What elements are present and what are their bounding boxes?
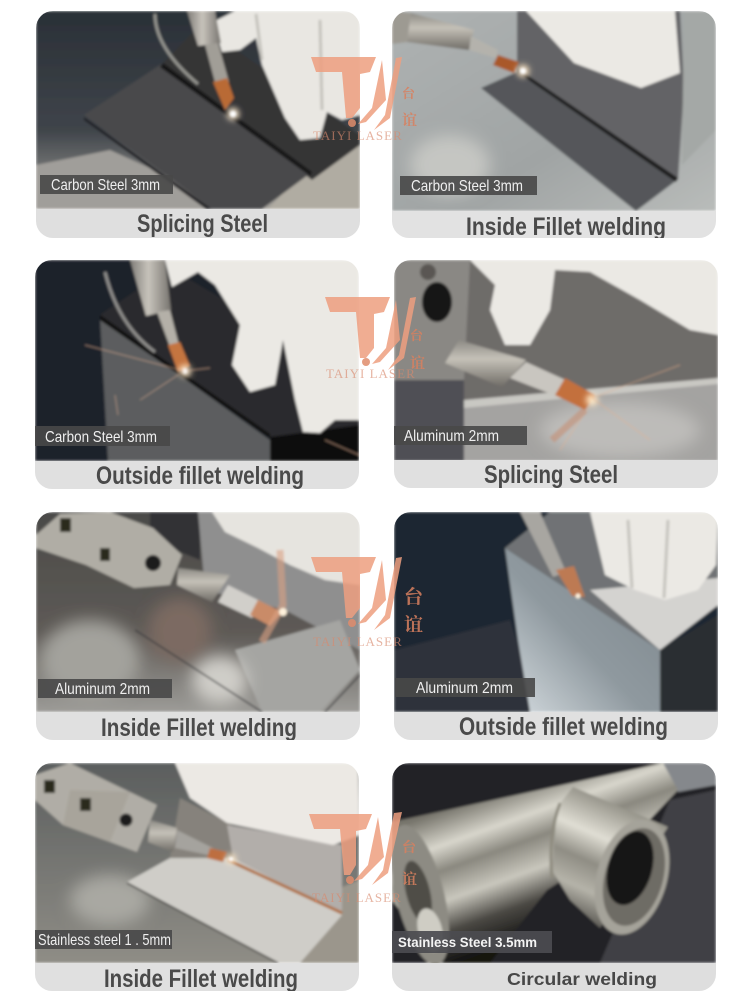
- material label: Stainless steel 1 . 5mm: [38, 932, 171, 949]
- caption strip: [394, 712, 718, 740]
- panel: inside fillet welding, carbon steel 3mm: [392, 11, 716, 241]
- material label: Aluminum 2mm: [404, 428, 499, 445]
- watermark: Taiyi Laser logo, row 2: [325, 297, 425, 381]
- photo: aluminium corner joint: [394, 512, 718, 712]
- watermark: Taiyi Laser logo, row 2: TAIYI LASER: [326, 366, 416, 381]
- panel: splicing steel, carbon steel 3mm: [36, 11, 360, 238]
- watermark: Taiyi Laser logo, row 2: 台: [410, 328, 424, 343]
- caption: Outside fillet welding: [459, 713, 668, 741]
- watermark: Taiyi Laser logo, row 4: TAIYI LASER: [312, 890, 402, 905]
- caption: Inside Fillet welding: [101, 714, 297, 742]
- watermark: Taiyi Laser logo, row 4: [309, 812, 417, 905]
- watermark: Taiyi Laser logo, row 1: 台: [402, 86, 416, 101]
- watermark: Taiyi Laser logo, row 3: 台: [404, 586, 424, 608]
- watermark: Taiyi Laser logo, row 3: 谊: [404, 614, 423, 636]
- panel: outside fillet welding, aluminum 2mm: [394, 512, 718, 741]
- material label: Aluminum 2mm: [55, 681, 150, 698]
- photo: plates and gloved hand: [36, 11, 360, 209]
- watermark: Taiyi Laser logo, row 4: 谊: [402, 870, 417, 888]
- panel: splicing steel, aluminum 2mm: [394, 260, 718, 489]
- material label: [392, 931, 552, 953]
- watermark: Taiyi Laser logo, row 1: [311, 57, 417, 143]
- watermark: Taiyi Laser logo, row 3: TAIYI LASER: [313, 634, 403, 649]
- watermark: Taiyi Laser logo, row 4: 台: [402, 839, 417, 856]
- panel: circular welding, stainless steel 3.5mm: [379, 763, 716, 991]
- material label: Aluminum 2mm: [416, 680, 513, 697]
- material label: Carbon Steel 3mm: [51, 177, 160, 194]
- panel: outside fillet welding, carbon steel 3mm: [35, 260, 359, 490]
- caption strip: [394, 460, 718, 488]
- photo: upright plate on base plate: [392, 11, 716, 211]
- caption strip: [35, 461, 359, 489]
- material label: Carbon Steel 3mm: [411, 178, 523, 195]
- panel: inside fillet welding, aluminum 2mm: [36, 512, 360, 742]
- caption strip: [36, 209, 360, 238]
- caption strip: [392, 211, 716, 238]
- panel: inside fillet welding, stainless steel 1.5mm: [35, 763, 359, 993]
- watermark: Taiyi Laser logo, row 1: TAIYI LASER: [313, 128, 403, 143]
- caption: Splicing Steel: [137, 210, 268, 238]
- caption strip: [35, 963, 359, 991]
- caption: Outside fillet welding: [96, 462, 304, 490]
- caption: Inside Fillet welding: [104, 965, 298, 993]
- caption: Inside Fillet welding: [466, 213, 666, 241]
- photo: torch on stainless plate: [35, 763, 359, 963]
- watermark: Taiyi Laser logo, row 3: [311, 557, 424, 649]
- material label: Carbon Steel 3mm: [45, 429, 157, 446]
- photo: welded stainless tee pipe: [379, 763, 716, 971]
- photo: torch on aluminium seam: [394, 260, 718, 461]
- caption strip: [392, 963, 716, 991]
- photo: torch head on aluminium plate: [36, 512, 360, 712]
- material label: Stainless Steel 3.5mm: [398, 934, 537, 950]
- caption: Circular welding: [507, 969, 657, 989]
- watermark: Taiyi Laser logo, row 1: 谊: [402, 111, 417, 129]
- watermark: Taiyi Laser logo, row 2: 谊: [410, 354, 425, 372]
- caption: Splicing Steel: [484, 461, 618, 489]
- caption strip: [36, 712, 360, 740]
- photo: corner joint with sparks: [35, 260, 359, 461]
